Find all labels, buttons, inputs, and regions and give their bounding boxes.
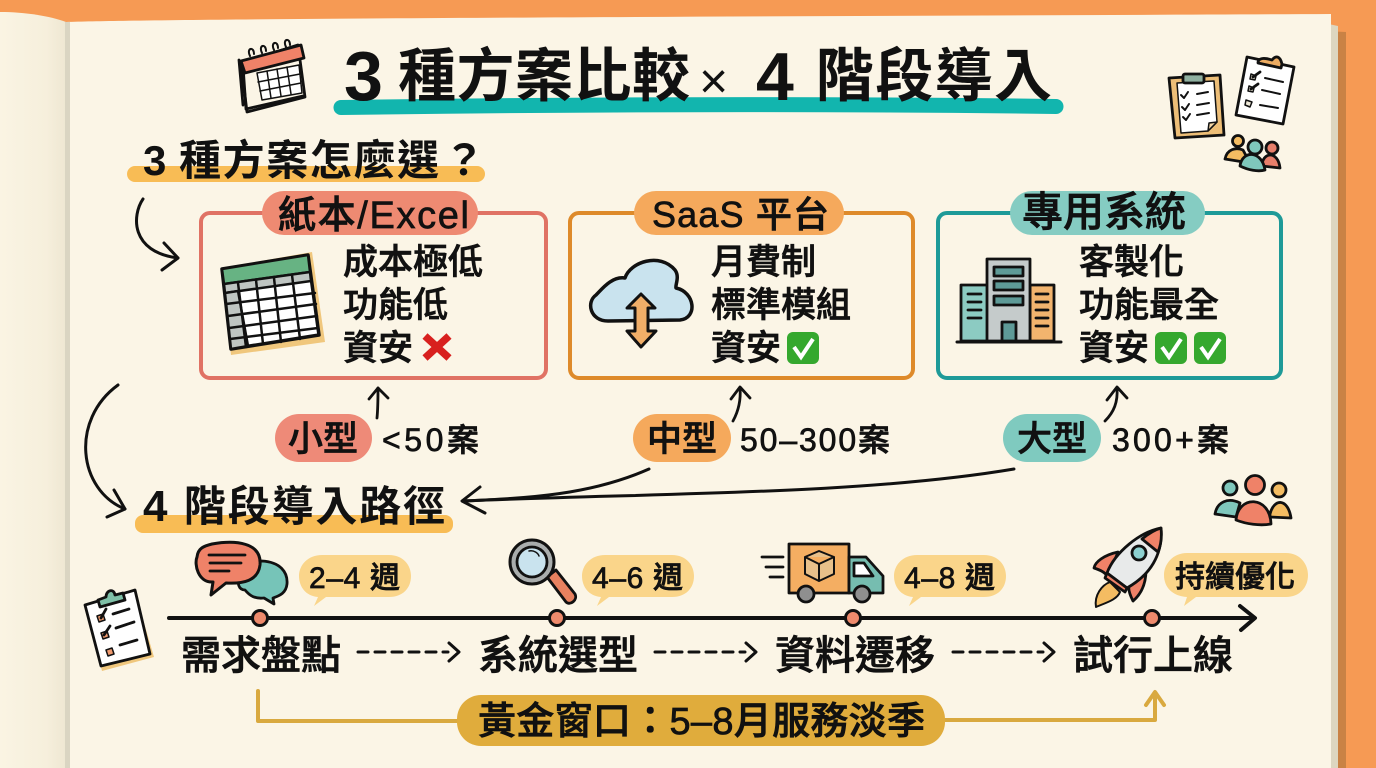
connector: golden window bbox=[258, 691, 1164, 721]
bubble: 4-8 weeks bbox=[894, 555, 1006, 606]
text: paper excel features: 功能低 bbox=[343, 286, 448, 325]
bubble: 2-4 weeks: 2–4 週 bbox=[309, 562, 400, 595]
text: saas features: 標準模組 bbox=[711, 286, 851, 325]
text: paper excel features bbox=[343, 243, 483, 368]
icon: red cross bbox=[425, 336, 449, 358]
icon: office building bbox=[957, 259, 1061, 342]
pill: medium: 中型 bbox=[647, 420, 717, 459]
title: × bbox=[699, 53, 728, 109]
pill: small: 小型 bbox=[288, 420, 358, 459]
callout: golden window: 黃金窗口：5–8月服務淡季 bbox=[478, 701, 925, 743]
heading: roadmap: 階段導入路徑 bbox=[184, 483, 445, 530]
heading: 3 plans: 種方案怎麼選 bbox=[179, 137, 439, 184]
arrow: left arc to roadmap bbox=[86, 385, 125, 517]
title underline bbox=[341, 105, 1056, 108]
arrow: small to paper bbox=[369, 388, 388, 418]
text: dedicated system features: 客製化 bbox=[1079, 243, 1184, 282]
heading: 3 plans: ？ bbox=[443, 137, 485, 184]
label: large volume: 300+案 bbox=[1112, 422, 1229, 458]
timeline bbox=[169, 606, 1255, 630]
tab: dedicated system bbox=[1010, 191, 1205, 235]
icon: team top right bbox=[1225, 136, 1280, 171]
text: saas features: 月費制 bbox=[711, 243, 816, 282]
timeline nodes bbox=[252, 610, 1160, 626]
title: 4 bbox=[756, 39, 794, 115]
text: dedicated system features: 功能最全 bbox=[1079, 286, 1219, 325]
step: pilot launch: 試行上線 bbox=[1073, 634, 1233, 678]
icon: rocket bbox=[1094, 528, 1161, 607]
arrow: plans merge to roadmap bbox=[462, 469, 1014, 513]
text: saas features: 資安 bbox=[711, 329, 781, 368]
title bbox=[344, 37, 1052, 115]
label: small volume: <50案 bbox=[382, 422, 479, 458]
icon: speech bubbles bbox=[196, 542, 287, 604]
title: 3 bbox=[344, 37, 383, 115]
tab label: SaaS 平台 bbox=[652, 194, 829, 235]
panel: dedicated system bbox=[938, 189, 1281, 378]
pill: large: 大型 bbox=[1017, 420, 1087, 459]
step: system selection: 系統選型 bbox=[478, 634, 638, 678]
bubble: continuous optimization bbox=[1164, 553, 1308, 606]
step: needs review: 需求盤點 bbox=[181, 634, 341, 678]
icon: delivery truck bbox=[762, 544, 883, 602]
text: paper excel features: 資安 bbox=[343, 329, 413, 368]
label: medium volume: 50–300案 bbox=[740, 422, 890, 458]
icon: two green checks bbox=[1155, 332, 1226, 364]
pill: medium bbox=[633, 414, 731, 462]
panel: paper excel bbox=[201, 191, 546, 378]
heading: 3 plans highlight bbox=[127, 166, 485, 182]
arrow: step 2 to 3 bbox=[655, 643, 756, 661]
icon: cloud bbox=[591, 260, 692, 347]
arrow: large to dedicated bbox=[1105, 387, 1127, 421]
title: 種方案比較 bbox=[398, 44, 690, 109]
tab label: 紙本/Excel bbox=[278, 195, 469, 237]
icon: checklist bbox=[85, 589, 154, 671]
text: dedicated system features bbox=[1079, 243, 1219, 368]
icon: magnifier bbox=[510, 540, 576, 603]
tab label: 專用系統 bbox=[1022, 189, 1186, 235]
panel: saas bbox=[570, 191, 913, 378]
icon: spreadsheet bbox=[221, 252, 325, 355]
icon: mini team bbox=[1215, 476, 1291, 525]
heading: roadmap: 4 bbox=[143, 482, 168, 531]
pill: large bbox=[1003, 414, 1101, 462]
icon: clipboards bbox=[1169, 57, 1294, 138]
heading: roadmap highlight bbox=[135, 515, 453, 533]
bubble: 2-4 weeks bbox=[299, 555, 411, 606]
arrow: step 1 to 2 bbox=[358, 643, 459, 661]
bubble: 4-6 weeks: 4–6 週 bbox=[592, 562, 683, 595]
arrow: step 3 to 4 bbox=[953, 643, 1054, 661]
step: data migration: 資料遷移 bbox=[775, 634, 935, 678]
title: 階段導入 bbox=[816, 44, 1052, 109]
tab: paper excel bbox=[262, 191, 478, 235]
tab: saas bbox=[634, 191, 844, 235]
bubble: continuous optimization: 持續優化 bbox=[1175, 561, 1295, 594]
text: paper excel features: 成本極低 bbox=[343, 243, 483, 282]
text: dedicated system features: 資安 bbox=[1079, 329, 1149, 368]
heading: 3 plans: 3 bbox=[143, 137, 166, 184]
icon: green check bbox=[787, 332, 819, 364]
arrow: heading to plans bbox=[137, 199, 178, 270]
pill: small bbox=[275, 414, 372, 462]
text: saas features bbox=[711, 243, 851, 368]
icon: calendar bbox=[239, 40, 305, 112]
bubble: 4-6 weeks bbox=[582, 555, 694, 606]
arrow: medium to saas bbox=[731, 387, 750, 421]
bubble: 4-8 weeks: 4–8 週 bbox=[904, 562, 995, 595]
